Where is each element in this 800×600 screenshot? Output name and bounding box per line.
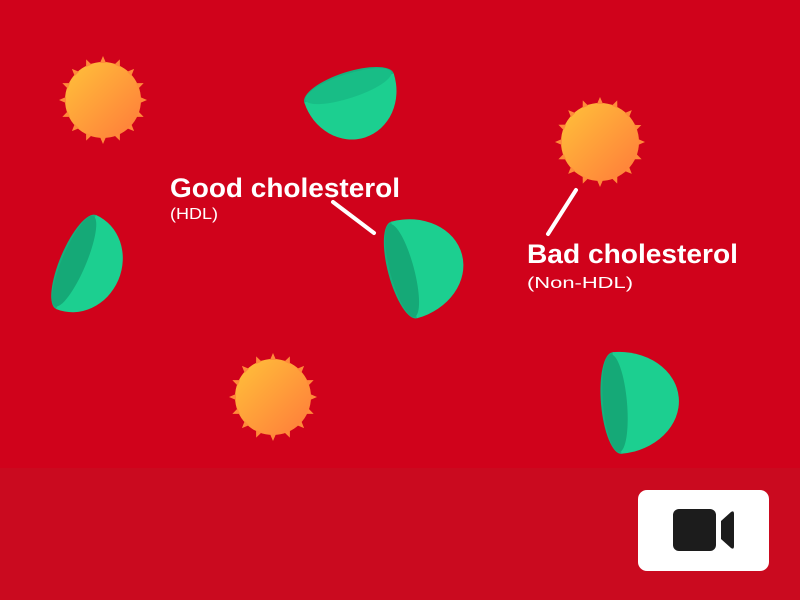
label: bad cholesterol [527,239,738,292]
green half-sphere: good cholesterol labelled [376,206,475,322]
sun: bad cholesterol labelled [555,97,645,187]
pointer line: bad cholesterol [548,190,576,234]
label: good cholesterol: (HDL) [170,206,218,223]
video button [638,490,769,571]
label: bad cholesterol: (Non-HDL) [527,275,633,292]
green half-sphere: bottom right [597,347,683,455]
green half-sphere: top [299,58,410,152]
pointer line: good cholesterol [333,202,374,233]
green half-sphere: left [41,209,138,327]
sun: bad cholesterol top-left [59,56,147,144]
sun: bad cholesterol bottom [229,353,317,441]
label: good cholesterol: Good cholesterol [170,173,400,203]
label: bad cholesterol: Bad cholesterol [527,239,738,269]
icon: video camera [673,509,734,551]
label: good cholesterol [170,173,400,223]
